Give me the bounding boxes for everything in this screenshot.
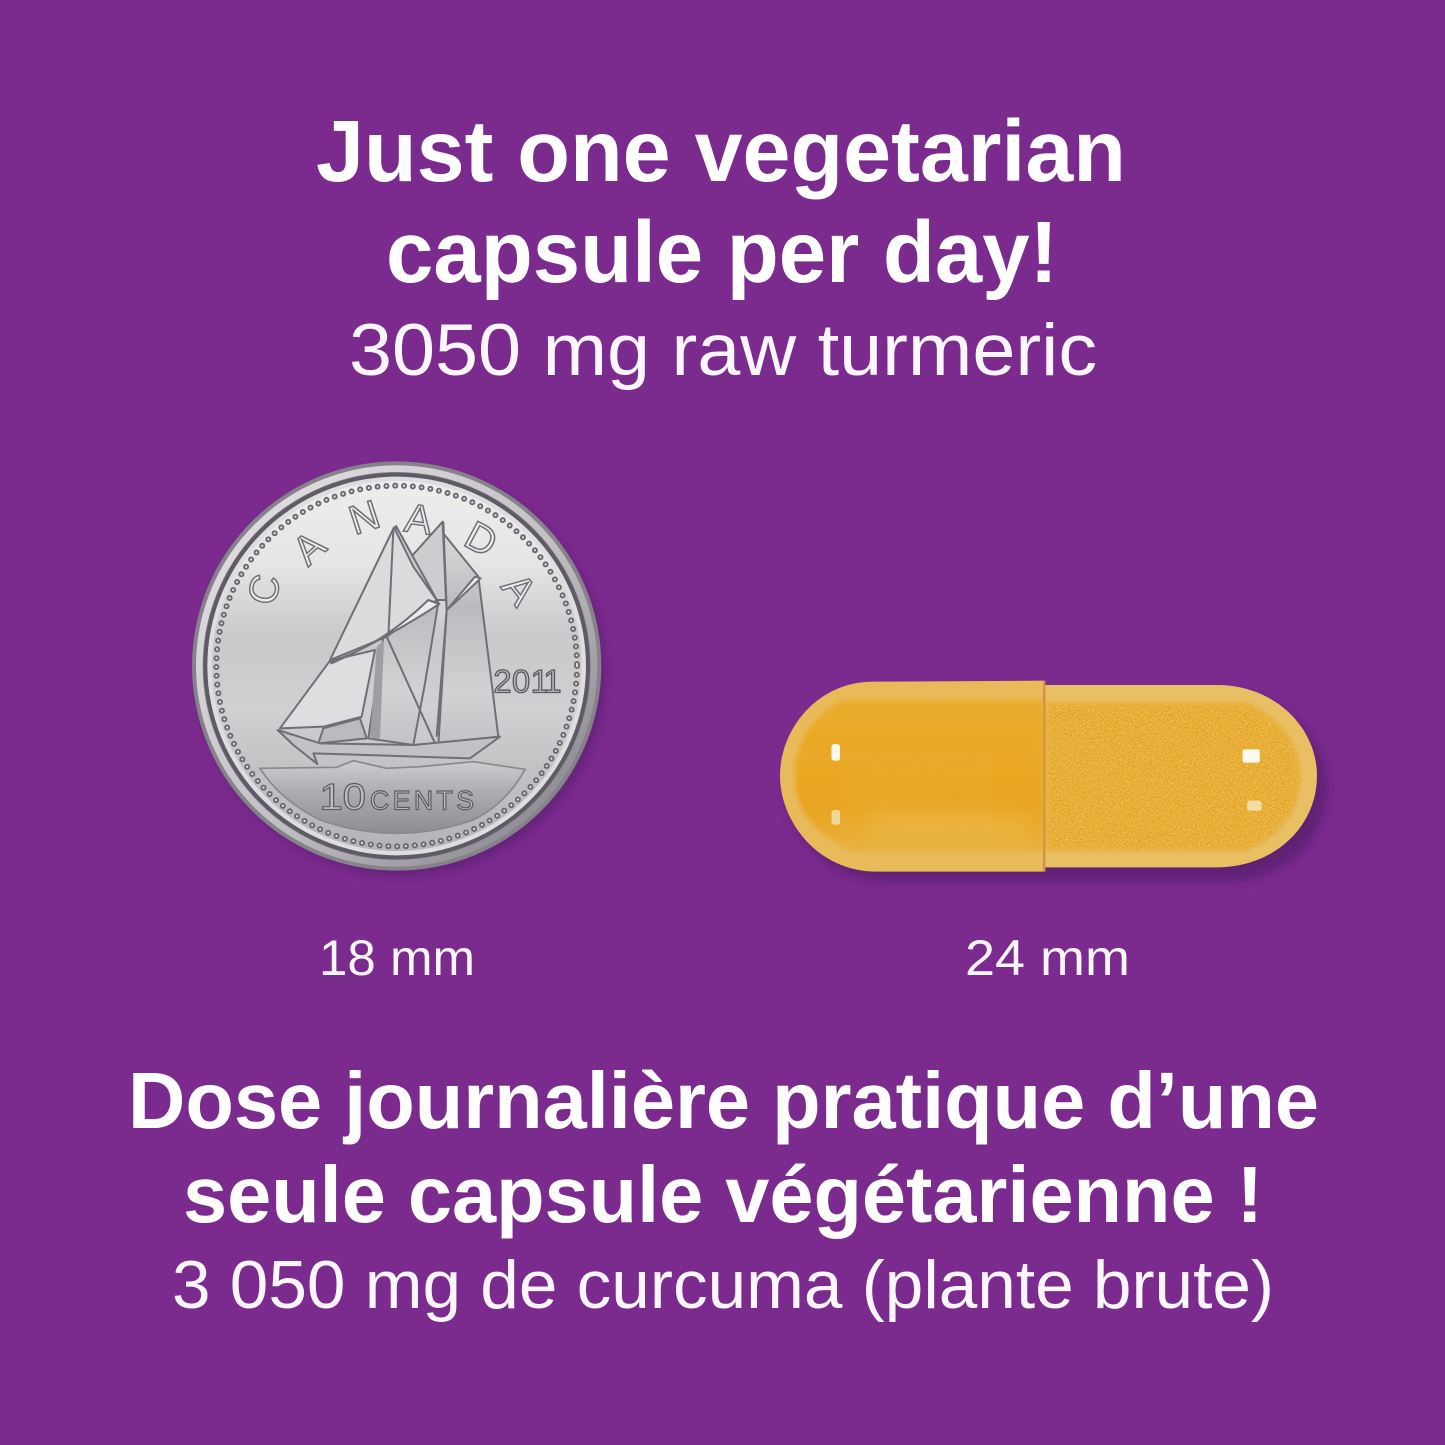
capsule highlights: [831, 744, 840, 761]
text: French dose: 3 050 mg de curcuma (plante brute): [172, 1247, 1274, 1323]
coin lettering: CANADA: A: [283, 521, 335, 574]
coin beaded edge: [216, 486, 577, 846]
label: capsule size: 24 mm: [965, 930, 1130, 986]
coin rim: [192, 461, 601, 871]
title: French headline: [128, 1056, 1319, 1239]
coin lettering: 10 CENTS: [319, 775, 474, 817]
capsule seam: [1042, 681, 1047, 872]
capsule powder fill: [1047, 703, 1299, 850]
title: French headline: Dose journalière pratique d’une: [128, 1056, 1319, 1145]
coin shadow: [198, 468, 606, 876]
title: English headline: [316, 103, 1126, 301]
coin lettering: CANADA: A: [493, 564, 546, 615]
image: turmeric capsule: [780, 681, 1328, 882]
coin lettering: CANADA: N: [343, 491, 385, 544]
capsule shadow: [788, 695, 1328, 882]
coin lettering: CANADA: C: [238, 570, 290, 609]
text: English dose: 3050 mg raw turmeric: [349, 310, 1097, 391]
image: Canadian 10 cent coin: [192, 461, 606, 876]
title: English headline: capsule per day!: [386, 204, 1058, 301]
coin face: [212, 481, 582, 851]
coin lettering: 10 CENTS: 10: [319, 775, 366, 817]
capsule body: [1045, 685, 1317, 867]
coin ship: [278, 522, 500, 764]
capsule lower cap band: [870, 810, 1027, 847]
capsule cap: [780, 681, 1043, 872]
coin lettering: year: 2011: [493, 662, 562, 699]
coin lettering: CANADA: [238, 491, 546, 615]
title: English headline: Just one vegetarian: [316, 103, 1126, 200]
coin lettering: CANADA: A: [402, 494, 436, 544]
coin lettering: CANADA: D: [458, 512, 505, 566]
label: coin size: 18 mm: [319, 930, 475, 986]
capsule speckle: [842, 703, 1299, 850]
coin lettering: 10 CENTS: CENTS: [370, 785, 474, 815]
coin sea: [260, 761, 525, 833]
title: French headline: seule capsule végétarienne !: [183, 1150, 1263, 1239]
